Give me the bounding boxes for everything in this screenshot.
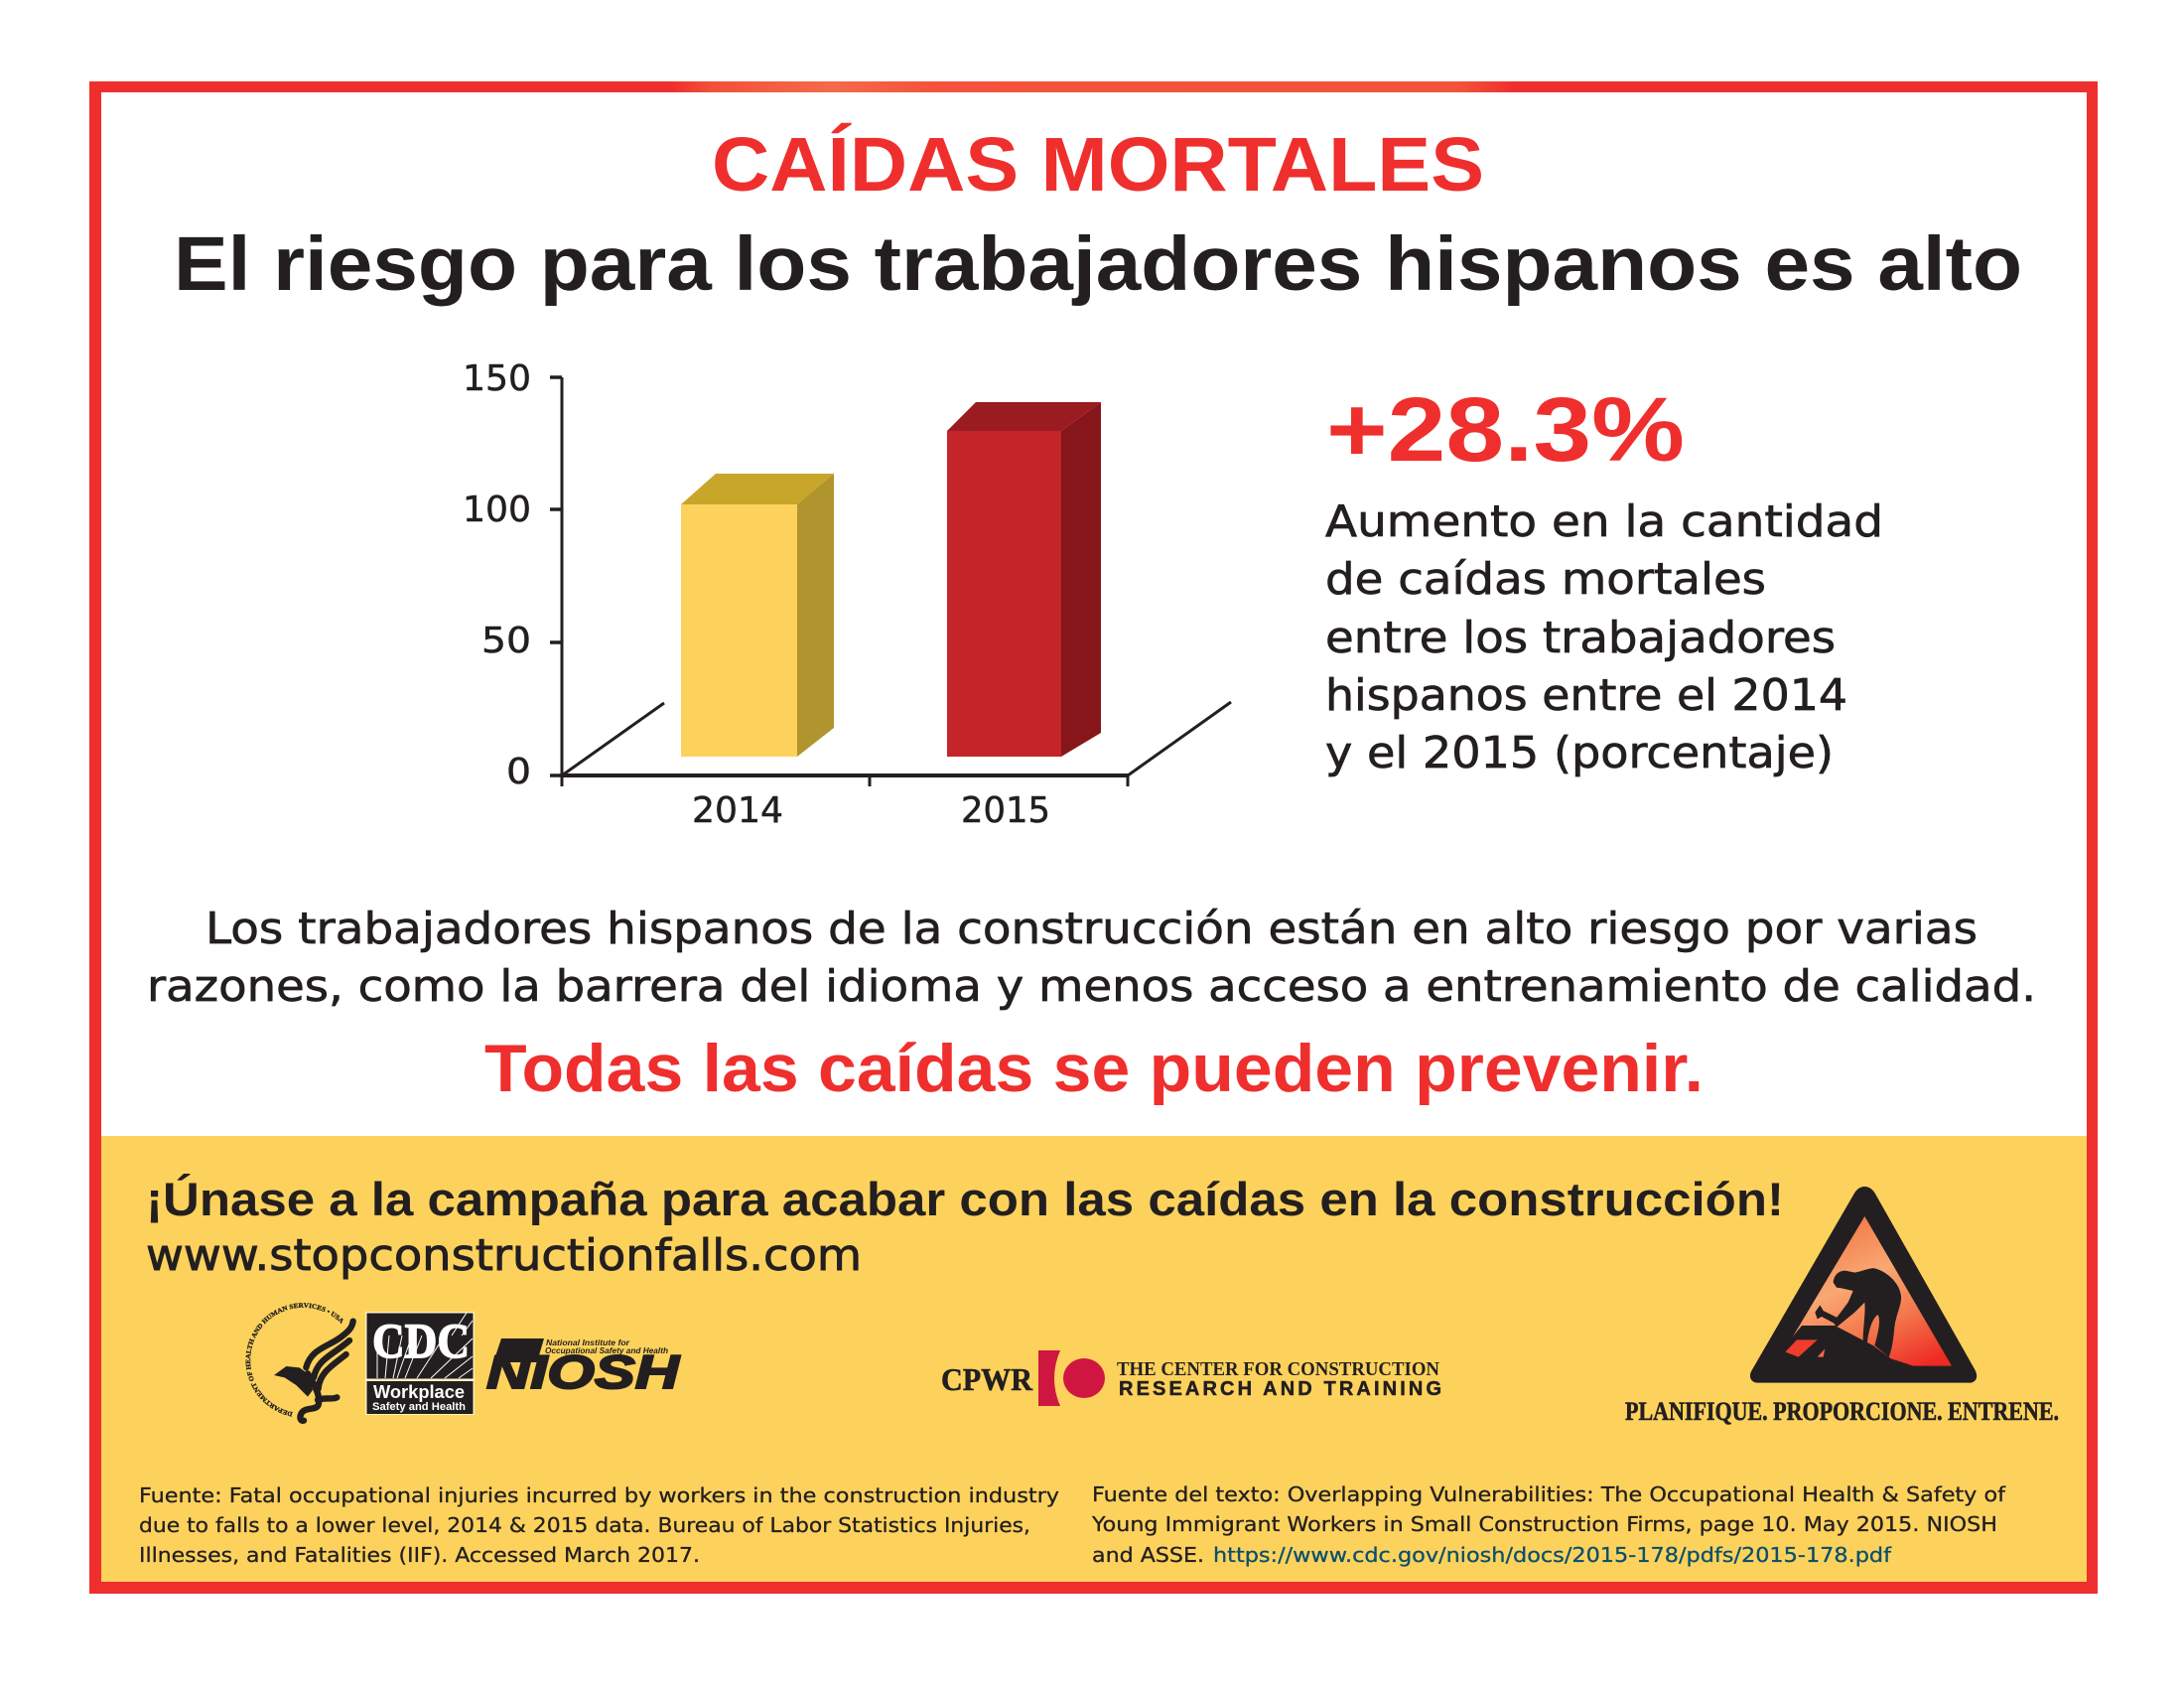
bar chart: fatal falls 2014 vs 2015 (463, 358, 1231, 831)
panel: call to action (101, 1136, 2087, 1582)
source note: data: due to falls to a lower level, 2014 & 2015 data. Bureau of Labor Statistics Injuries, (139, 1513, 1030, 1537)
y axis labels (463, 358, 531, 792)
x axis labels: 2015 (961, 790, 1050, 831)
logo: CPWR (941, 1350, 1441, 1406)
icon: warning triangle with worker (1750, 1187, 1977, 1383)
statistic description (1325, 496, 1883, 778)
statistic description: de caídas mortales (1325, 554, 1766, 605)
explanatory text: razones, como la barrera del idioma y menos acceso a entrenamiento de calidad. (147, 961, 2036, 1012)
x axis labels (692, 790, 1050, 831)
campaign url: www.stopconstructionfalls.com (146, 1230, 862, 1281)
logo: CDC Workplace Safety and Health: CDC (372, 1313, 470, 1368)
logo: CPWR: RESEARCH AND TRAINING (1119, 1378, 1441, 1400)
statistic description: Aumento en la cantidad (1325, 496, 1883, 547)
y axis labels: 50 (481, 621, 531, 661)
explanatory text: Los trabajadores hispanos de la construcción están en alto riesgo por varias (205, 904, 1978, 954)
chart axes (550, 377, 1231, 786)
logo: NIOSH (486, 1338, 680, 1398)
source note: text: Young Immigrant Workers in Small Construction Firms, page 10. May 2015. NIOSH (1091, 1512, 1997, 1536)
campaign slogan: PLANIFIQUE. PROPORCIONE. ENTRENE. (1625, 1397, 2059, 1426)
explanatory text (147, 904, 2036, 1012)
y axis labels: 150 (463, 358, 531, 399)
logo: CDC Workplace Safety and Health (365, 1312, 475, 1415)
source note: data: Fuente: Fatal occupational injuries incurred by workers in the construction industry (139, 1483, 1059, 1507)
statistic description: entre los trabajadores (1325, 613, 1836, 663)
logo: NIOSH: NIOSH (486, 1345, 680, 1398)
logo: NIOSH: Occupational Safety and Health (545, 1346, 668, 1355)
worker silhouette (1834, 1268, 1901, 1357)
y axis labels: 0 (506, 752, 531, 792)
x axis labels: 2014 (692, 790, 783, 831)
statistic description: y el 2015 (porcentaje) (1325, 728, 1834, 778)
source note: data (139, 1483, 1059, 1567)
logo: CPWR: CPWR (941, 1361, 1033, 1397)
source note: text: Fuente del texto: Overlapping Vulnerabilities: The Occupational Health & Safety of (1092, 1482, 2006, 1506)
subtitle: El riesgo para los trabajadores hispanos es alto (174, 221, 2022, 307)
key statistic: +28.3% (1326, 379, 1685, 481)
source note: text: and ASSE. (1092, 1543, 1204, 1567)
source note: text: https://www.cdc.gov/niosh/docs/2015-178/pdfs/2015-178.pdf (1213, 1543, 1892, 1567)
source note: text (1091, 1482, 2006, 1567)
logo: CDC Workplace Safety and Health: Workplace (373, 1382, 465, 1402)
source note: data: Illnesses, and Fatalities (IIF). Accessed March 2017. (139, 1543, 700, 1567)
logo: CDC Workplace Safety and Health: Safety and Health (372, 1401, 466, 1413)
logo: NIOSH: National Institute for (546, 1338, 630, 1347)
statistic description: hispanos entre el 2014 (1325, 670, 1847, 721)
logo: HHS seal: DEPARTMENT OF HEALTH AND HUMAN SERVICES • USA (246, 1303, 343, 1417)
logo: CPWR: THE CENTER FOR CONSTRUCTION (1117, 1358, 1440, 1380)
title: CAÍDAS MORTALES (712, 122, 1484, 208)
bar: 2015 (947, 402, 1101, 757)
bar: 2014 (681, 474, 834, 757)
y axis labels: 100 (463, 490, 531, 530)
campaign heading: ¡Únase a la campaña para acabar con las caídas en la construcción! (146, 1173, 1784, 1225)
prevention statement: Todas las caídas se pueden prevenir. (484, 1031, 1704, 1106)
